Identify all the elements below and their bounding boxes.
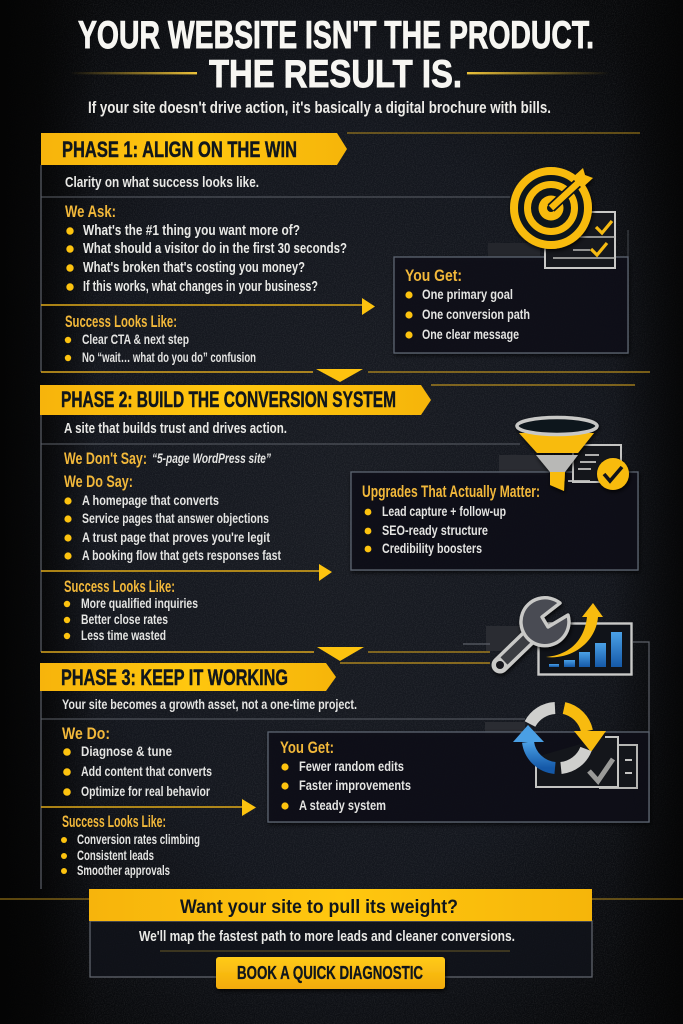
success looks like list: Consistent leads: [77, 848, 154, 863]
we ask list: If this works, what changes in your business?: [83, 279, 318, 295]
we do say list: A homepage that converts: [82, 493, 219, 508]
we do list: Optimize for real behavior: [81, 784, 211, 799]
phase 1 banner: [41, 133, 347, 165]
we ask list: What's the #1 thing you want more of?: [83, 223, 300, 239]
cta banner: [89, 889, 592, 921]
cta body box: [90, 921, 592, 977]
success looks like list: Better close rates: [81, 612, 168, 627]
we do say list: [64, 473, 281, 563]
subtitle: If your site doesn't drive action, it's basically a digital brochure with bills.: [88, 99, 551, 117]
connector arrow: phase 1 to phase 2: [316, 369, 363, 382]
we don't say: “5-page WordPress site”: [152, 451, 271, 466]
upgrades box: Credibility boosters: [382, 541, 482, 556]
phase 1 summary: Clarity on what success looks like.: [65, 175, 259, 191]
cta text: We'll map the fastest path to more leads and cleaner conversions.: [139, 929, 515, 945]
panel: phase 1: [41, 133, 650, 372]
we don't say: [64, 450, 271, 468]
we ask list: [65, 203, 347, 295]
you get box: One primary goal: [422, 287, 513, 302]
success looks like list: Smoother approvals: [77, 863, 170, 878]
success looks like list: Conversion rates climbing: [77, 832, 200, 847]
success looks like list: Success Looks Like:: [64, 578, 175, 596]
we ask list: What should a visitor do in the first 30 seconds?: [83, 241, 347, 257]
cta button: BOOK A QUICK DIAGNOSTIC: [237, 963, 423, 983]
success looks like list: No “wait… what do you do” confusion: [82, 350, 256, 365]
you get box: You Get:: [280, 739, 334, 757]
you get box: One clear message: [422, 327, 519, 342]
header: [70, 14, 610, 117]
icon: target and checklist: [514, 168, 615, 268]
success looks like list: Clear CTA & next step: [82, 332, 189, 347]
panel: phase 2: [40, 385, 638, 652]
success looks like list: More qualified inquiries: [81, 596, 198, 611]
arrow: [41, 564, 332, 581]
success looks like list: [61, 813, 200, 878]
success looks like list: [65, 313, 256, 365]
icon: funnel with check: [517, 418, 629, 491]
you get box: Fewer random edits: [299, 759, 404, 774]
we ask list: We Ask:: [65, 203, 116, 221]
panel: phase 3: [40, 598, 649, 889]
title rule left: [70, 72, 197, 74]
phase 3 summary: Your site becomes a growth asset, not a one-time project.: [62, 697, 357, 712]
cta banner: Want your site to pull its weight?: [180, 897, 458, 918]
title line 2: THE RESULT IS.: [209, 53, 462, 96]
phase 2 summary: A site that builds trust and drives action.: [64, 421, 287, 437]
you get box: One conversion path: [422, 307, 530, 322]
you get box: A steady system: [299, 798, 386, 813]
we do say list: A booking flow that gets responses fast: [82, 548, 281, 563]
we don't say: We Don't Say:: [64, 450, 147, 468]
we do list: [62, 725, 212, 799]
you get box: You Get:: [405, 267, 462, 285]
arrow: [41, 799, 256, 816]
you get box: [268, 722, 649, 822]
icon: cycle arrows and document: [513, 708, 637, 788]
phase 2 banner: [40, 385, 431, 415]
arrow: [41, 298, 375, 315]
success looks like list: Success Looks Like:: [62, 813, 166, 831]
success looks like list: [64, 578, 198, 643]
we do list: Add content that converts: [81, 764, 212, 779]
cta button: [216, 957, 445, 989]
you get box: Faster improvements: [299, 778, 411, 793]
phase 2 banner: PHASE 2: BUILD THE CONVERSION SYSTEM: [61, 387, 396, 412]
upgrades box: [351, 455, 638, 570]
we do list: Diagnose & tune: [81, 744, 172, 759]
we do say list: A trust page that proves you're legit: [82, 530, 270, 545]
we do list: We Do:: [62, 725, 110, 743]
icon: wrench and growth chart: [496, 598, 632, 674]
upgrades box: Lead capture + follow-up: [382, 504, 506, 519]
phase 3 banner: PHASE 3: KEEP IT WORKING: [61, 665, 288, 690]
success looks like list: Success Looks Like:: [65, 313, 177, 331]
connector arrow: phase 2 to phase 3: [317, 647, 364, 661]
call to action: [0, 889, 683, 989]
you get box: [394, 230, 628, 353]
we ask list: What's broken that's costing you money?: [83, 260, 305, 276]
upgrades box: Upgrades That Actually Matter:: [362, 483, 540, 501]
phase 1 banner: PHASE 1: ALIGN ON THE WIN: [62, 137, 297, 162]
upgrades box: SEO-ready structure: [382, 523, 488, 538]
title rule right: [467, 72, 610, 74]
we do say list: Service pages that answer objections: [82, 511, 269, 526]
success looks like list: Less time wasted: [81, 628, 166, 643]
we do say list: We Do Say:: [64, 473, 133, 491]
